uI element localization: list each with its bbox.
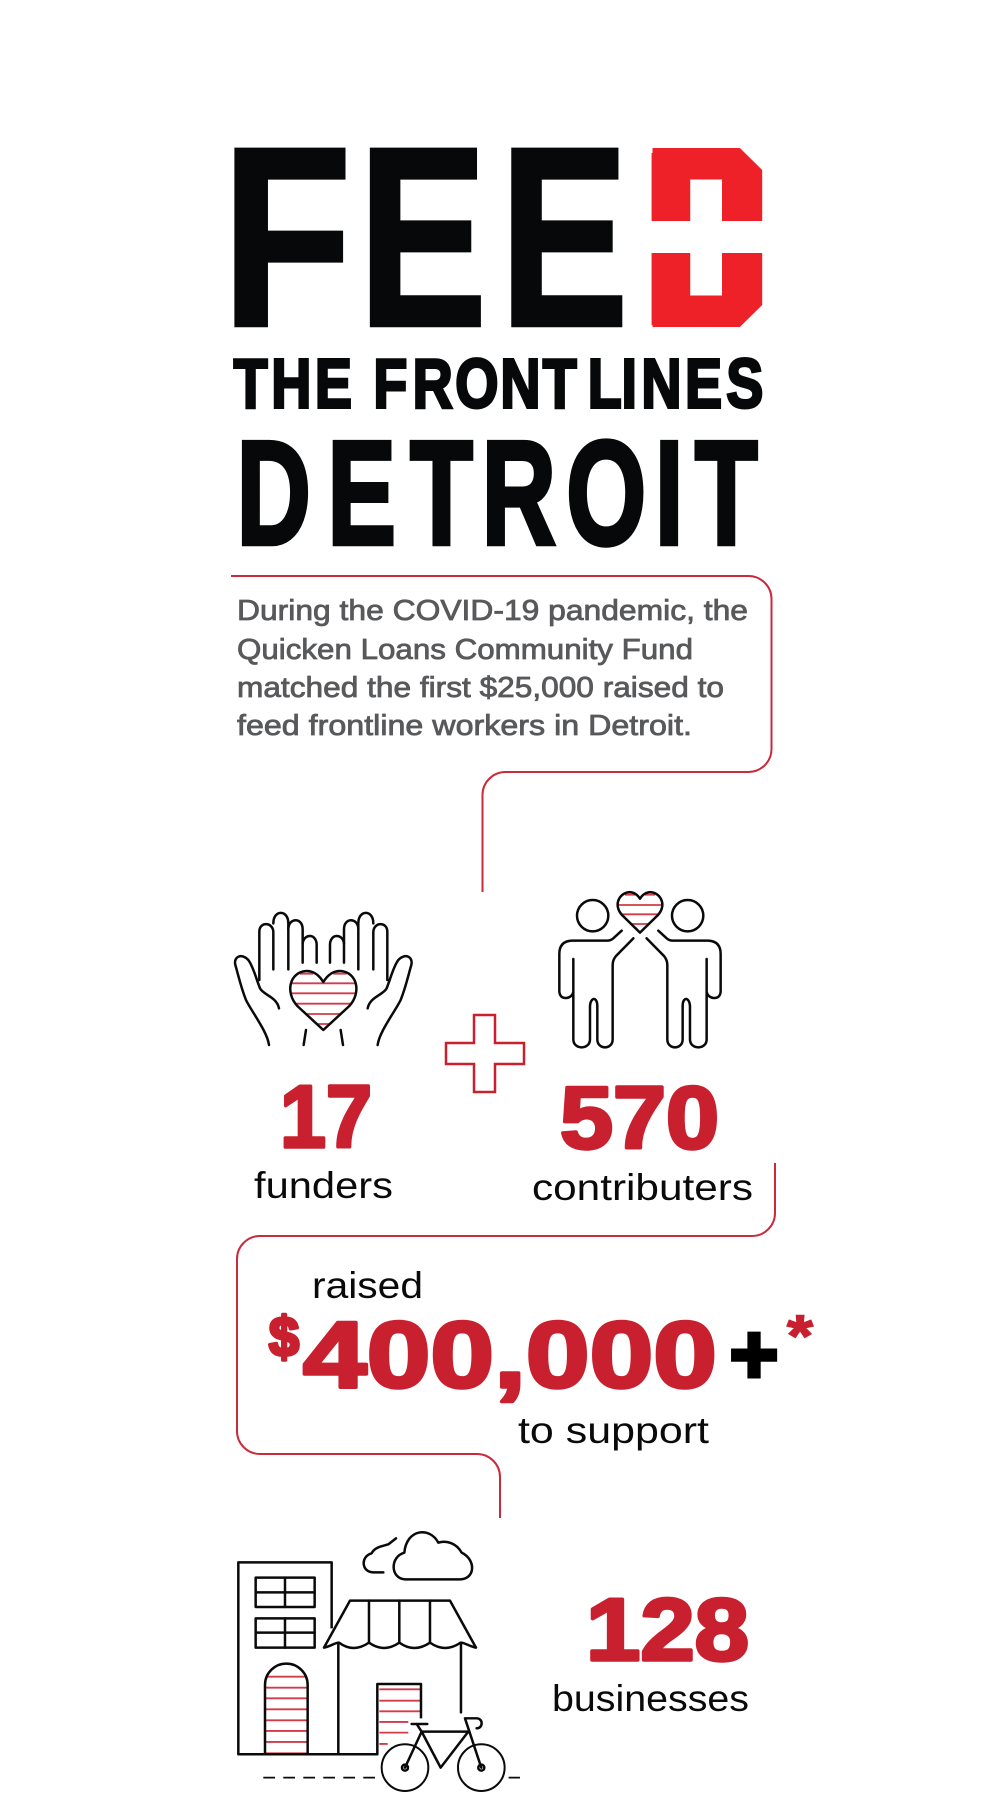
text block: intro paragraph: matched the first $25,000 raised to [237, 672, 724, 704]
stat: $400,000+*: 400,000 [303, 1302, 717, 1407]
text block: intro paragraph [237, 595, 748, 742]
stat: 570 contributers [532, 1068, 753, 1208]
icon: hands holding heart [235, 913, 412, 1045]
connector line: intro [231, 576, 772, 892]
stat: $400,000+*: + [729, 1307, 779, 1401]
icon: red D with cross cutout: D [642, 99, 749, 378]
text: raised: raised [312, 1265, 423, 1306]
stat: $400,000+*: $ [269, 1305, 299, 1368]
title: Feed the Frontlines Detroit logo [222, 94, 768, 577]
heading: FEE letters: E [500, 95, 628, 381]
icon: outlined plus [446, 1015, 524, 1092]
heading: FEE letters: E [358, 95, 487, 381]
stat: 128 businesses [552, 1580, 749, 1719]
text block: intro paragraph: feed frontline workers in Detroit. [237, 710, 692, 742]
connector line: raised box [237, 1163, 775, 1518]
heading: FEE letters: F [222, 94, 352, 380]
stat: 17 funders: funders [254, 1165, 393, 1206]
text block: intro paragraph: Quicken Loans Community Fund [237, 634, 693, 666]
stat: 570 contributers: contributers [532, 1167, 753, 1208]
stat: 570 contributers: 570 [560, 1068, 719, 1167]
text: to support: to support [518, 1410, 710, 1451]
text block: intro paragraph: During the COVID-19 pandemic, the [237, 595, 748, 627]
stat: 128 businesses: businesses [552, 1678, 749, 1719]
stat: $400,000+* [269, 1302, 813, 1407]
heading: THE FRONTLINES: THE FRONTLINES [234, 345, 763, 423]
stat: $400,000+*: * [787, 1304, 813, 1369]
stat: 17 funders [254, 1067, 393, 1206]
icon: two people with heart [559, 892, 721, 1047]
heading: FEE letters [222, 94, 628, 381]
stat: 17 funders: 17 [280, 1067, 372, 1166]
icon: storefront, building, clouds and bicycle [238, 1532, 520, 1791]
heading: DETROIT: DETROIT [237, 412, 758, 577]
stat: 128 businesses: 128 [586, 1580, 749, 1679]
